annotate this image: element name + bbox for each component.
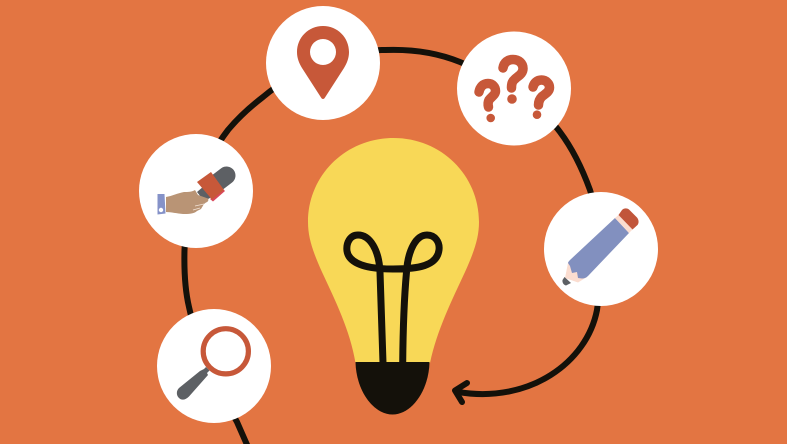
bulb base <box>356 362 430 414</box>
icon: pencil <box>544 192 658 306</box>
bulb filament <box>347 235 439 363</box>
light bulb <box>308 138 479 414</box>
icon: magnifying glass <box>157 309 271 423</box>
icon: location pin <box>266 6 380 120</box>
icon: question marks <box>457 32 571 146</box>
arrow: circular cycle path <box>184 50 600 444</box>
bulb glass <box>308 138 479 363</box>
icon: hand holding microphone <box>139 134 253 248</box>
